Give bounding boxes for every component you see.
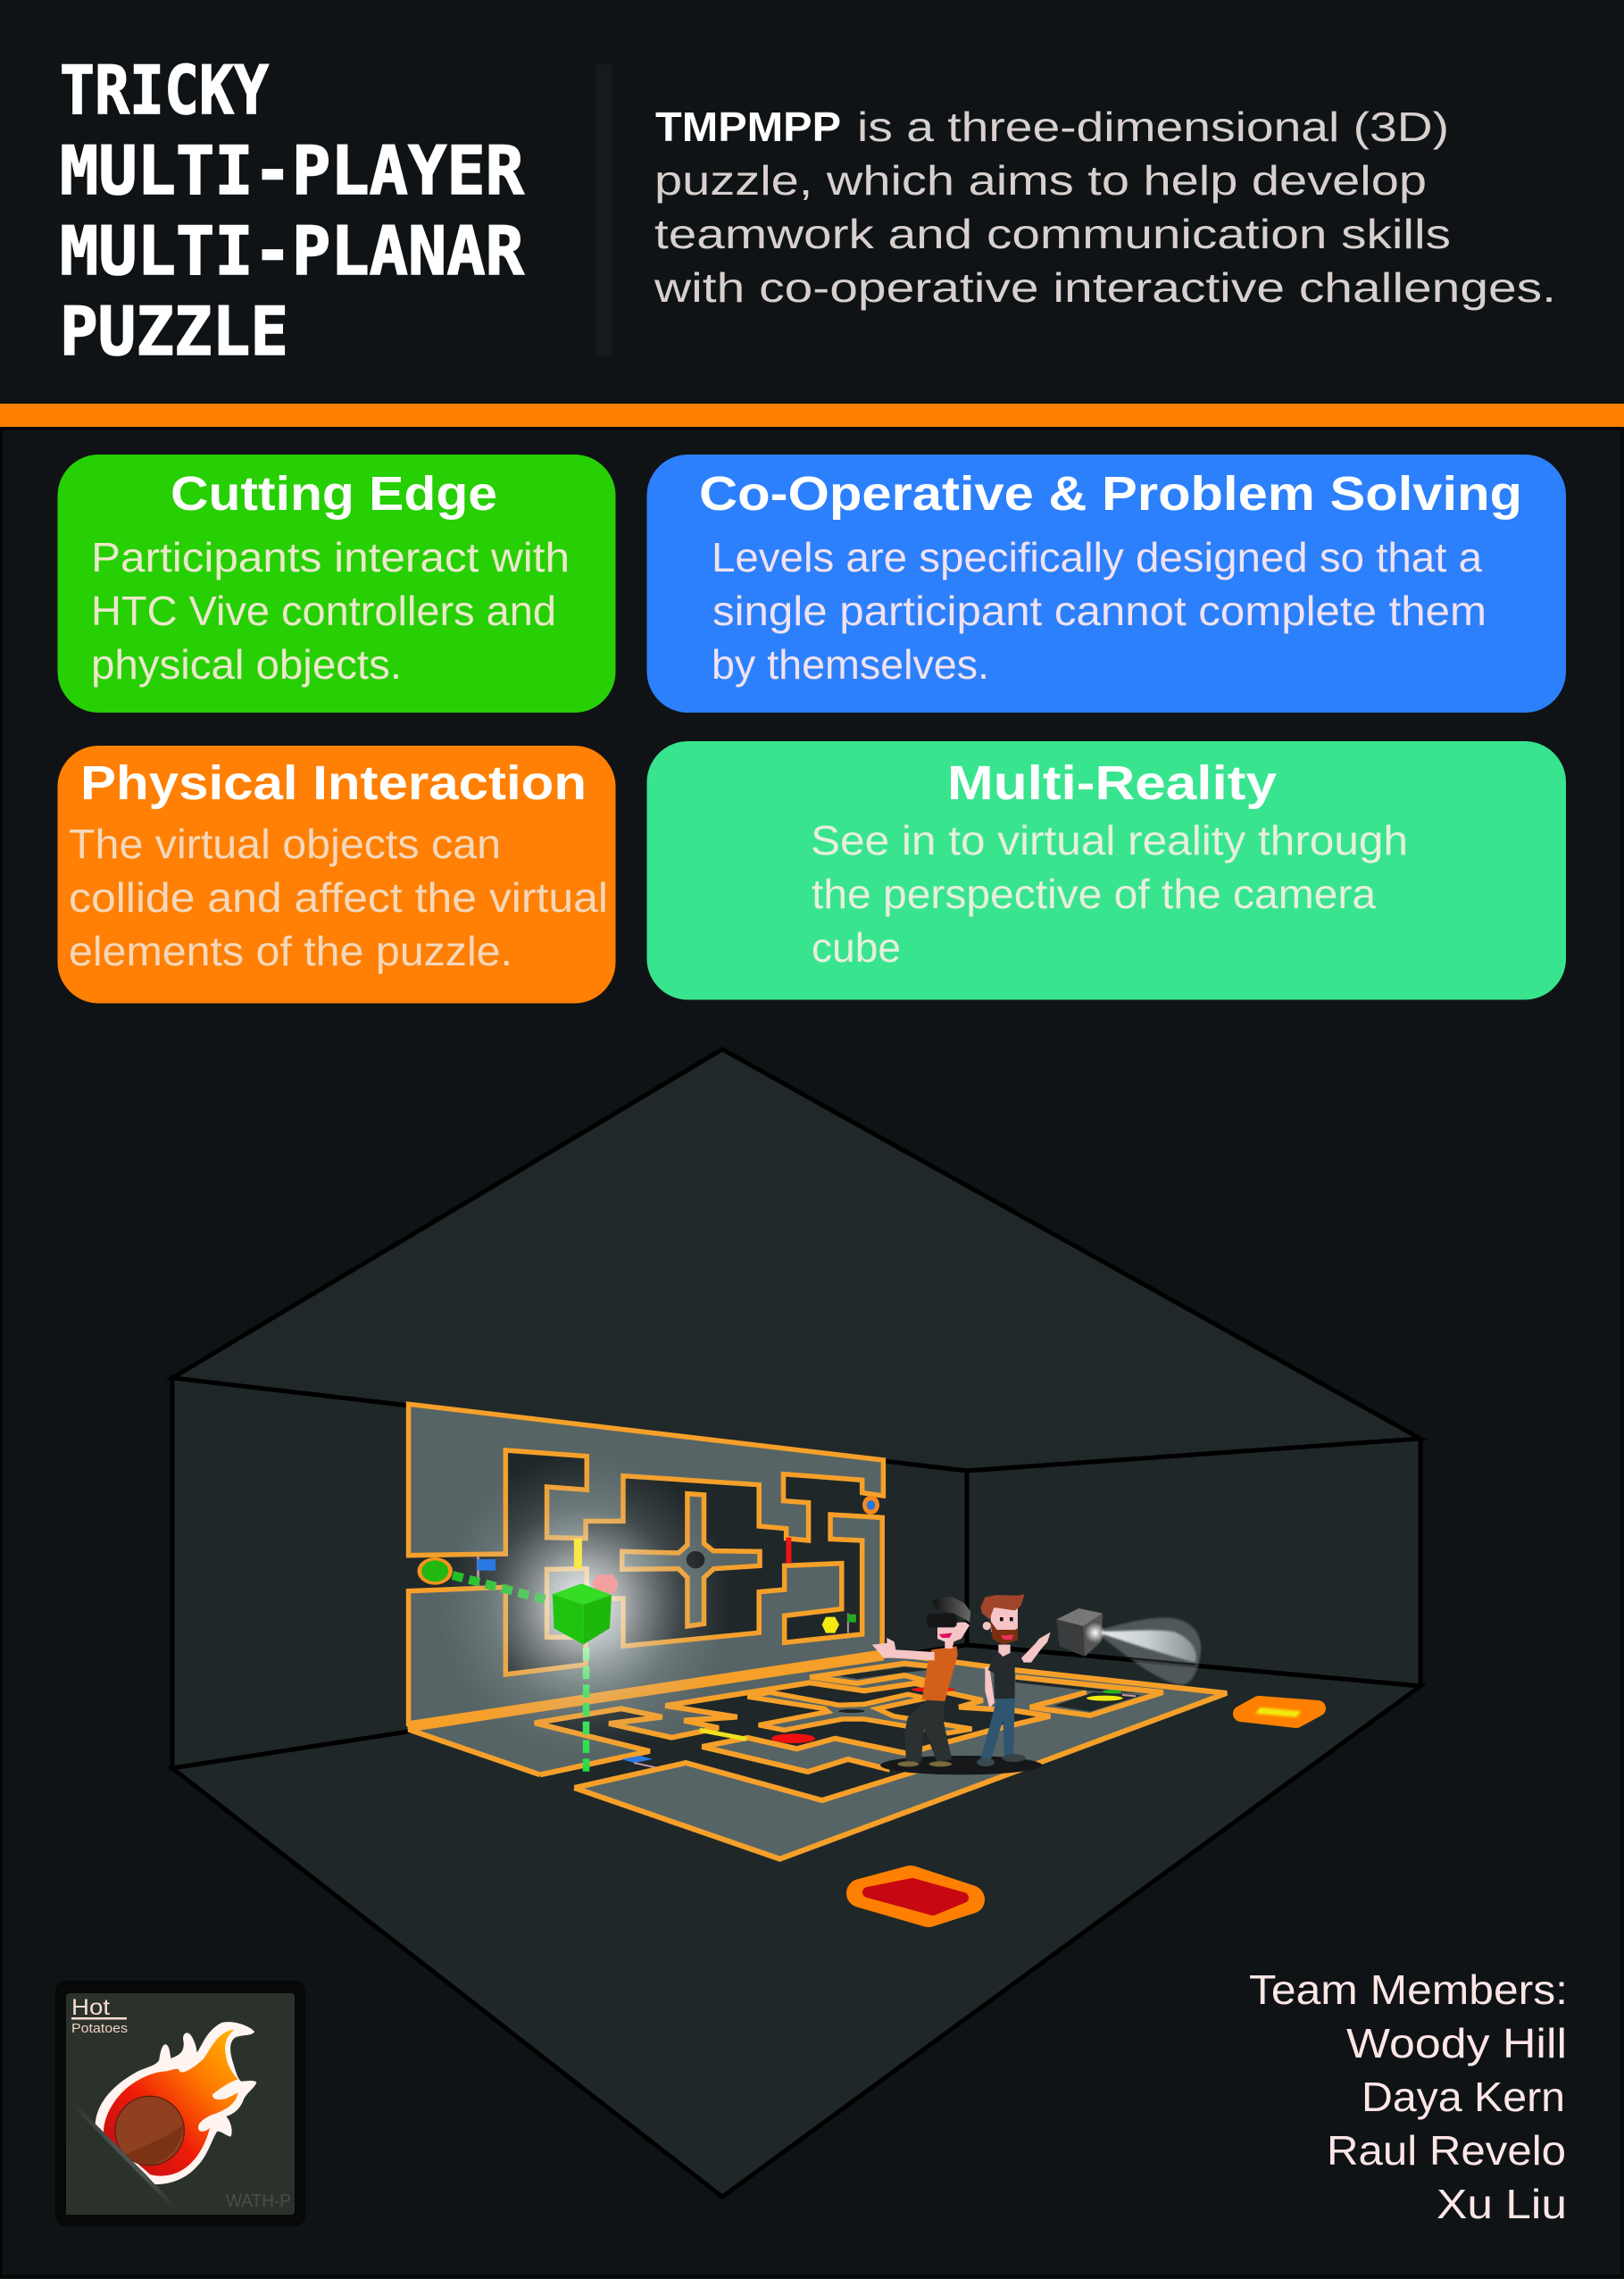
floor shadow (880, 1756, 1042, 1774)
green cube (553, 1583, 612, 1645)
pink hexagon (592, 1574, 619, 1593)
camera cube (1056, 1608, 1105, 1657)
3D room illustration (172, 1049, 1420, 2197)
title: PUZZLE (60, 292, 288, 371)
room floor (172, 1645, 1420, 2197)
room left wall (172, 1378, 967, 1768)
text: cutting edge body: physical objects. (91, 641, 402, 688)
red door (786, 1538, 791, 1564)
text: cutting edge body: Participants interact with (91, 534, 570, 580)
red pressure pad (861, 1880, 970, 1913)
icon: flaming potato (66, 2022, 256, 2215)
team members: Team Members: (1249, 1966, 1568, 2013)
text: physical interaction body: elements of the puzzle. (69, 928, 512, 974)
exit circle (862, 1496, 879, 1515)
logo: hot potatoes: Potatoes (71, 2021, 128, 2036)
room right wall (967, 1439, 1420, 1686)
logo: hot potatoes: WATH-P (226, 2191, 291, 2211)
text: physical interaction body (69, 821, 608, 974)
start circle (417, 1557, 453, 1585)
text: physical interaction body: The virtual objects can (69, 821, 501, 867)
text: co-operative body: by themselves. (712, 641, 989, 688)
upper wall block (409, 1404, 883, 1556)
text: co-operative body: single participant cannot complete them (712, 588, 1487, 634)
panel: cutting edge: Cutting Edge (171, 467, 497, 521)
text: multi-reality body: cube (812, 924, 901, 971)
text: co-operative body (712, 534, 1487, 688)
yellow door (574, 1539, 582, 1569)
title (60, 51, 525, 371)
lower wall block (409, 1515, 882, 1724)
wall base strip (407, 1657, 883, 1727)
team members (1249, 1966, 1568, 2227)
team members: Xu Liu (1437, 2181, 1567, 2227)
team members: Daya Kern (1362, 2074, 1565, 2120)
yellow pressure pad (1241, 1704, 1318, 1720)
title: MULTI-PLANAR (60, 212, 525, 290)
floor blue flag (621, 1756, 653, 1763)
floor maze (409, 1654, 1227, 1859)
panel: co-operative and problem solving (646, 455, 1566, 713)
text: co-operative body: Levels are specifically designed so that a (712, 534, 1482, 580)
intro text block: is a three-dimensional (3D) (857, 104, 1449, 150)
floor upper channel (839, 1667, 934, 1679)
wall objects (417, 1496, 879, 1633)
camera light beam (1095, 1617, 1201, 1685)
text: physical interaction body: collide and affect the virtual (69, 874, 608, 921)
room ceiling (172, 1049, 1420, 1471)
people and camera cube (872, 1594, 1105, 1774)
logo: hot potatoes (55, 1981, 305, 2226)
team members: Woody Hill (1346, 2020, 1567, 2066)
text: multi-reality body (811, 817, 1408, 971)
panel: multi-reality (646, 741, 1566, 1000)
floor red button (771, 1733, 815, 1743)
title: MULTI-PLAYER (60, 131, 525, 210)
intro text block (654, 104, 1556, 311)
panel: physical interaction (57, 746, 616, 1004)
green dashed paths (453, 1575, 586, 1773)
intro text block: teamwork and communication skills (654, 211, 1451, 257)
text: multi-reality body: See in to virtual reality through (811, 817, 1408, 864)
team members: Raul Revelo (1327, 2127, 1566, 2174)
text: cutting edge body: HTC Vive controllers and (91, 588, 556, 634)
intro text block: TMPMPP (655, 104, 841, 150)
green flag (847, 1614, 849, 1633)
floor cross (748, 1692, 971, 1733)
panel: co-operative and problem solving: Co-Operative & Problem Solving (699, 467, 1522, 521)
man with VR headset (872, 1597, 970, 1766)
panel: cutting edge (57, 455, 616, 713)
panel: physical interaction: Physical Interaction (80, 756, 587, 810)
title: TRICKY (60, 51, 269, 129)
cube glow (437, 1453, 732, 1757)
intro text block: with co-operative interactive challenges. (654, 264, 1556, 311)
wall cross (622, 1494, 760, 1626)
floor end markers (1087, 1696, 1123, 1701)
logo: hot potatoes: Hot (71, 1995, 110, 2020)
blue flag (477, 1557, 479, 1586)
text: multi-reality body: the perspective of the camera (812, 871, 1376, 917)
panel: multi-reality: Multi-Reality (947, 756, 1277, 810)
yellow hexagon (822, 1617, 839, 1633)
intro text block: puzzle, which aims to help develop (654, 157, 1427, 204)
wall maze (407, 1404, 883, 1727)
floor yellow door (700, 1730, 746, 1739)
text: cutting edge body (91, 534, 570, 688)
bearded man (977, 1594, 1051, 1766)
